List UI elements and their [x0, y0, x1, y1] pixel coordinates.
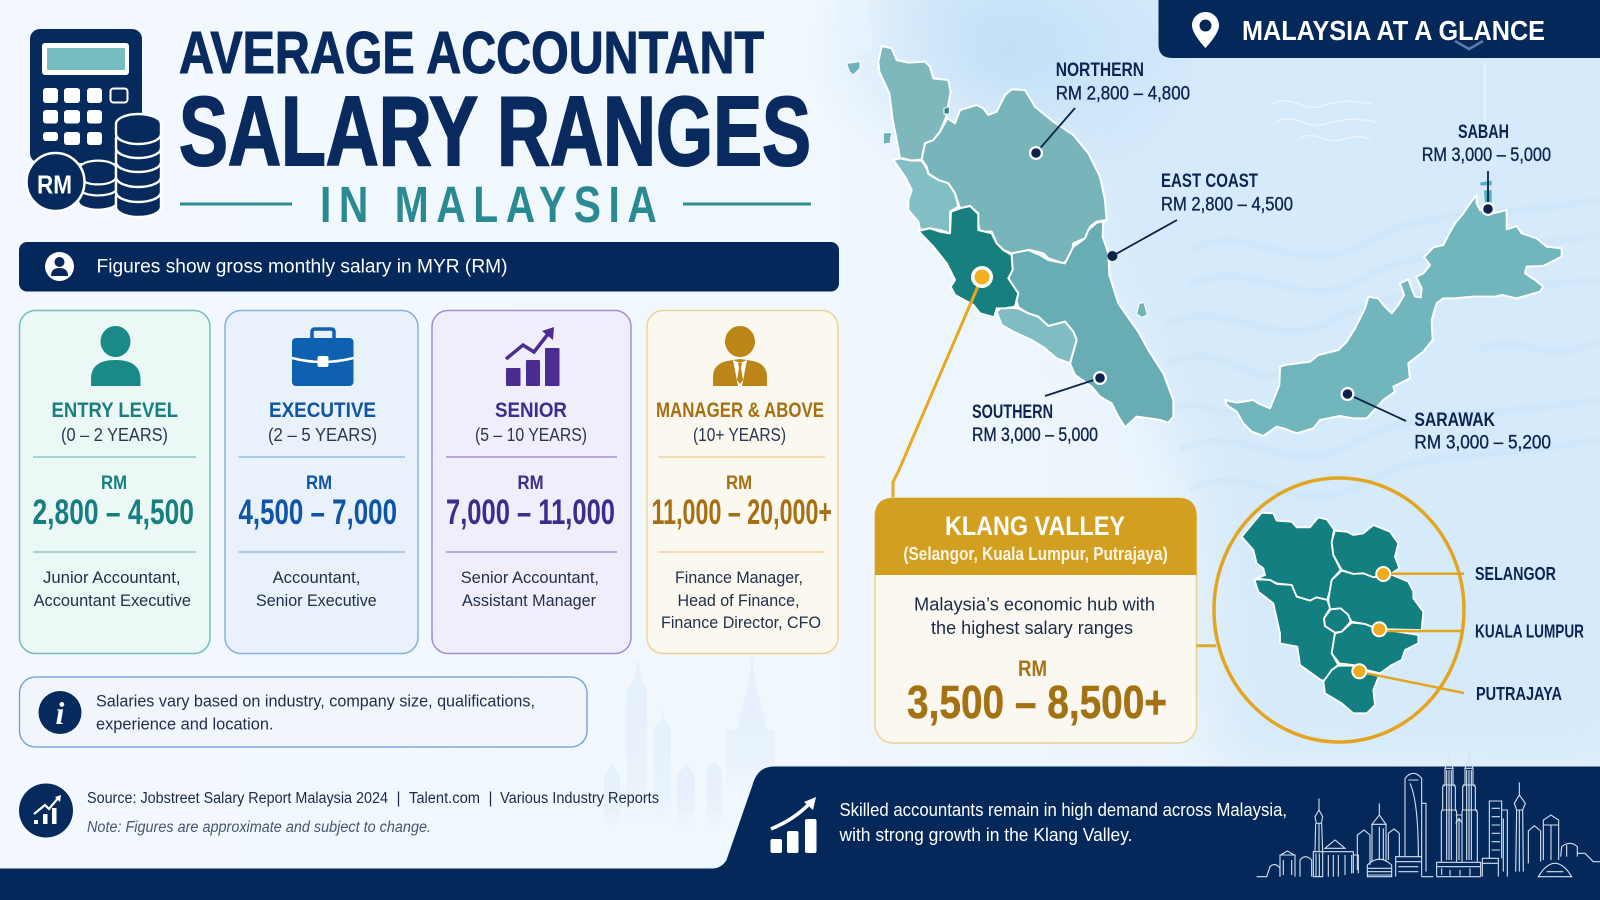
- header tab: malaysia at a glance: MALAYSIA AT A GLANCE: [1242, 15, 1545, 46]
- panel: senior: [432, 310, 631, 654]
- map callout: east coast: RM 2,800 – 4,500: [1161, 195, 1293, 216]
- panel: entry level: 2,800 – 4,500: [32, 493, 194, 532]
- map: peninsular malaysia: [847, 46, 1173, 427]
- salary range: RM: [518, 472, 544, 494]
- panel header: [875, 498, 1196, 575]
- title: [179, 20, 811, 233]
- title line 3: [180, 176, 811, 233]
- job roles: Junior Accountant,: [43, 568, 180, 587]
- calculator keys: [43, 88, 128, 145]
- notice bar: [19, 242, 839, 292]
- map callout: southern: [972, 371, 1107, 446]
- calculator screen: [42, 43, 129, 75]
- map callout: sarawak: SARAWAK: [1414, 410, 1495, 431]
- footer message: Skilled accountants remain in high demand across Malaysia,: [840, 800, 1287, 820]
- job roles: [256, 568, 377, 610]
- detail map: klang valley: [1214, 478, 1584, 742]
- panel header: KLANG VALLEY: [945, 511, 1125, 541]
- source note: Note: Figures are approximate and subject to change.: [87, 819, 431, 836]
- selangor marker: [1375, 564, 1556, 584]
- source note: Source: Jobstreet Salary Report Malaysia 2024: [87, 790, 388, 807]
- job roles: Finance Director, CFO: [661, 613, 821, 632]
- title line 1: AVERAGE ACCOUNTANT: [179, 20, 764, 86]
- job roles: Accountant Executive: [34, 591, 191, 610]
- icon: growth bars: [770, 797, 816, 853]
- map regions: [1242, 513, 1423, 713]
- info callout: [20, 677, 587, 747]
- map callout: sabah: RM 3,000 – 5,000: [1422, 145, 1551, 166]
- region: klang valley: [918, 206, 1018, 317]
- icon: briefcase: [292, 329, 354, 386]
- calculator body: [30, 29, 142, 163]
- panel header: (Selangor, Kuala Lumpur, Putrajaya): [903, 544, 1168, 564]
- icon: growth chart badge: [19, 784, 73, 838]
- header tab: malaysia at a glance: [1158, 0, 1600, 58]
- salary range: RM: [306, 472, 332, 494]
- panel: manager and above: [647, 310, 838, 654]
- panel: entry level: (0 – 2 YEARS): [61, 425, 168, 445]
- panel: executive: 4,500 – 7,000: [238, 493, 397, 532]
- map callout: northern: RM 2,800 – 4,800: [1056, 84, 1190, 104]
- map callout: sabah: SABAH: [1458, 122, 1509, 143]
- icon: map pin: [1192, 12, 1219, 48]
- card heading: EXECUTIVE: [269, 399, 376, 422]
- island east: [1137, 303, 1147, 317]
- RM coin: [26, 153, 84, 211]
- panel: manager and above: 11,000 – 20,000+: [652, 493, 832, 532]
- source note: |: [488, 790, 493, 807]
- region: west: [893, 158, 958, 233]
- panel: senior: (5 – 10 YEARS): [475, 425, 587, 445]
- region: north west: [878, 46, 951, 161]
- map: east malaysia: [1225, 181, 1562, 436]
- source note: [19, 784, 659, 838]
- faded skyline background: [604, 655, 774, 830]
- icon: rising bars: [506, 327, 560, 386]
- map callout: northern: [1029, 60, 1190, 160]
- salary range: RM: [1018, 656, 1047, 681]
- icon: info: [38, 691, 82, 734]
- description: the highest salary ranges: [931, 617, 1133, 638]
- kuala lumpur marker: [1371, 621, 1584, 642]
- connector to detail map: [1196, 644, 1216, 647]
- putrajaya marker: [1351, 663, 1562, 704]
- card heading: SENIOR: [495, 399, 567, 422]
- icon: person: [91, 326, 140, 386]
- leader line: klang valley: [893, 266, 993, 498]
- map callout: southern: RM 3,000 – 5,000: [972, 425, 1098, 446]
- job roles: Senior Executive: [256, 591, 377, 610]
- notice bar: Figures show gross monthly salary in MYR (RM): [96, 256, 508, 278]
- description: Malaysia’s economic hub with: [914, 594, 1155, 615]
- map callout: southern: SOUTHERN: [972, 402, 1053, 423]
- job roles: Senior Accountant,: [461, 568, 599, 587]
- putrajaya marker: PUTRAJAYA: [1476, 684, 1562, 704]
- skyline line art: [1257, 752, 1600, 877]
- panel: manager and above: (10+ YEARS): [693, 425, 786, 445]
- region: southern: [997, 307, 1077, 363]
- job roles: [34, 568, 191, 610]
- region: east coast: [1008, 222, 1173, 427]
- islands west: [847, 62, 949, 144]
- map callout: northern: NORTHERN: [1056, 60, 1144, 81]
- panel: entry level: [20, 310, 210, 654]
- source note: Talent.com: [409, 790, 480, 807]
- panel: klang valley: [875, 498, 1196, 743]
- job roles: [661, 568, 821, 632]
- selangor marker: SELANGOR: [1475, 564, 1556, 584]
- map callout: east coast: EAST COAST: [1161, 171, 1258, 192]
- large coin stack: [116, 114, 161, 217]
- info callout: Salaries vary based on industry, company size, qualifications,: [96, 692, 535, 711]
- small coin stack: [78, 161, 116, 210]
- job roles: Head of Finance,: [678, 591, 800, 610]
- footer message: [839, 800, 1287, 845]
- title line 2: SALARY RANGES: [179, 76, 811, 186]
- regions traced south: [997, 222, 1173, 427]
- icon: manager: [713, 326, 767, 386]
- job roles: Assistant Manager: [462, 591, 596, 610]
- panel: senior: 7,000 – 11,000: [446, 493, 615, 532]
- map callout: sabah: [1422, 122, 1551, 216]
- map callout: sarawak: RM 3,000 – 5,200: [1414, 432, 1551, 454]
- icon: info: i: [56, 695, 65, 731]
- map callout: east coast: [1107, 171, 1293, 261]
- title line 3: IN MALAYSIA: [320, 176, 657, 233]
- job roles: [461, 568, 599, 610]
- job roles: Accountant,: [273, 568, 360, 587]
- region: northern: [922, 89, 1107, 263]
- job roles: Finance Manager,: [675, 568, 803, 587]
- map callout: sarawak: [1340, 387, 1551, 454]
- calculator and coins icon: RM: [37, 170, 72, 200]
- source note: |: [396, 790, 401, 807]
- footer band: [0, 752, 1600, 900]
- card heading: ENTRY LEVEL: [52, 399, 178, 422]
- source note: Various Industry Reports: [500, 790, 659, 807]
- info callout: experience and location.: [96, 714, 274, 734]
- footer message: with strong growth in the Klang Valley.: [839, 825, 1132, 845]
- card heading: MANAGER & ABOVE: [656, 399, 824, 422]
- panel: executive: (2 – 5 YEARS): [268, 425, 377, 445]
- icon: person badge: [45, 252, 74, 281]
- panel: klang valley: 3,500 – 8,500+: [907, 676, 1167, 728]
- salary range: RM: [726, 472, 752, 494]
- panel: executive: [225, 310, 418, 654]
- calculator and coins icon: [26, 29, 161, 217]
- salary range: RM: [101, 472, 127, 494]
- description: [914, 594, 1155, 638]
- regions traced north: [847, 46, 1107, 263]
